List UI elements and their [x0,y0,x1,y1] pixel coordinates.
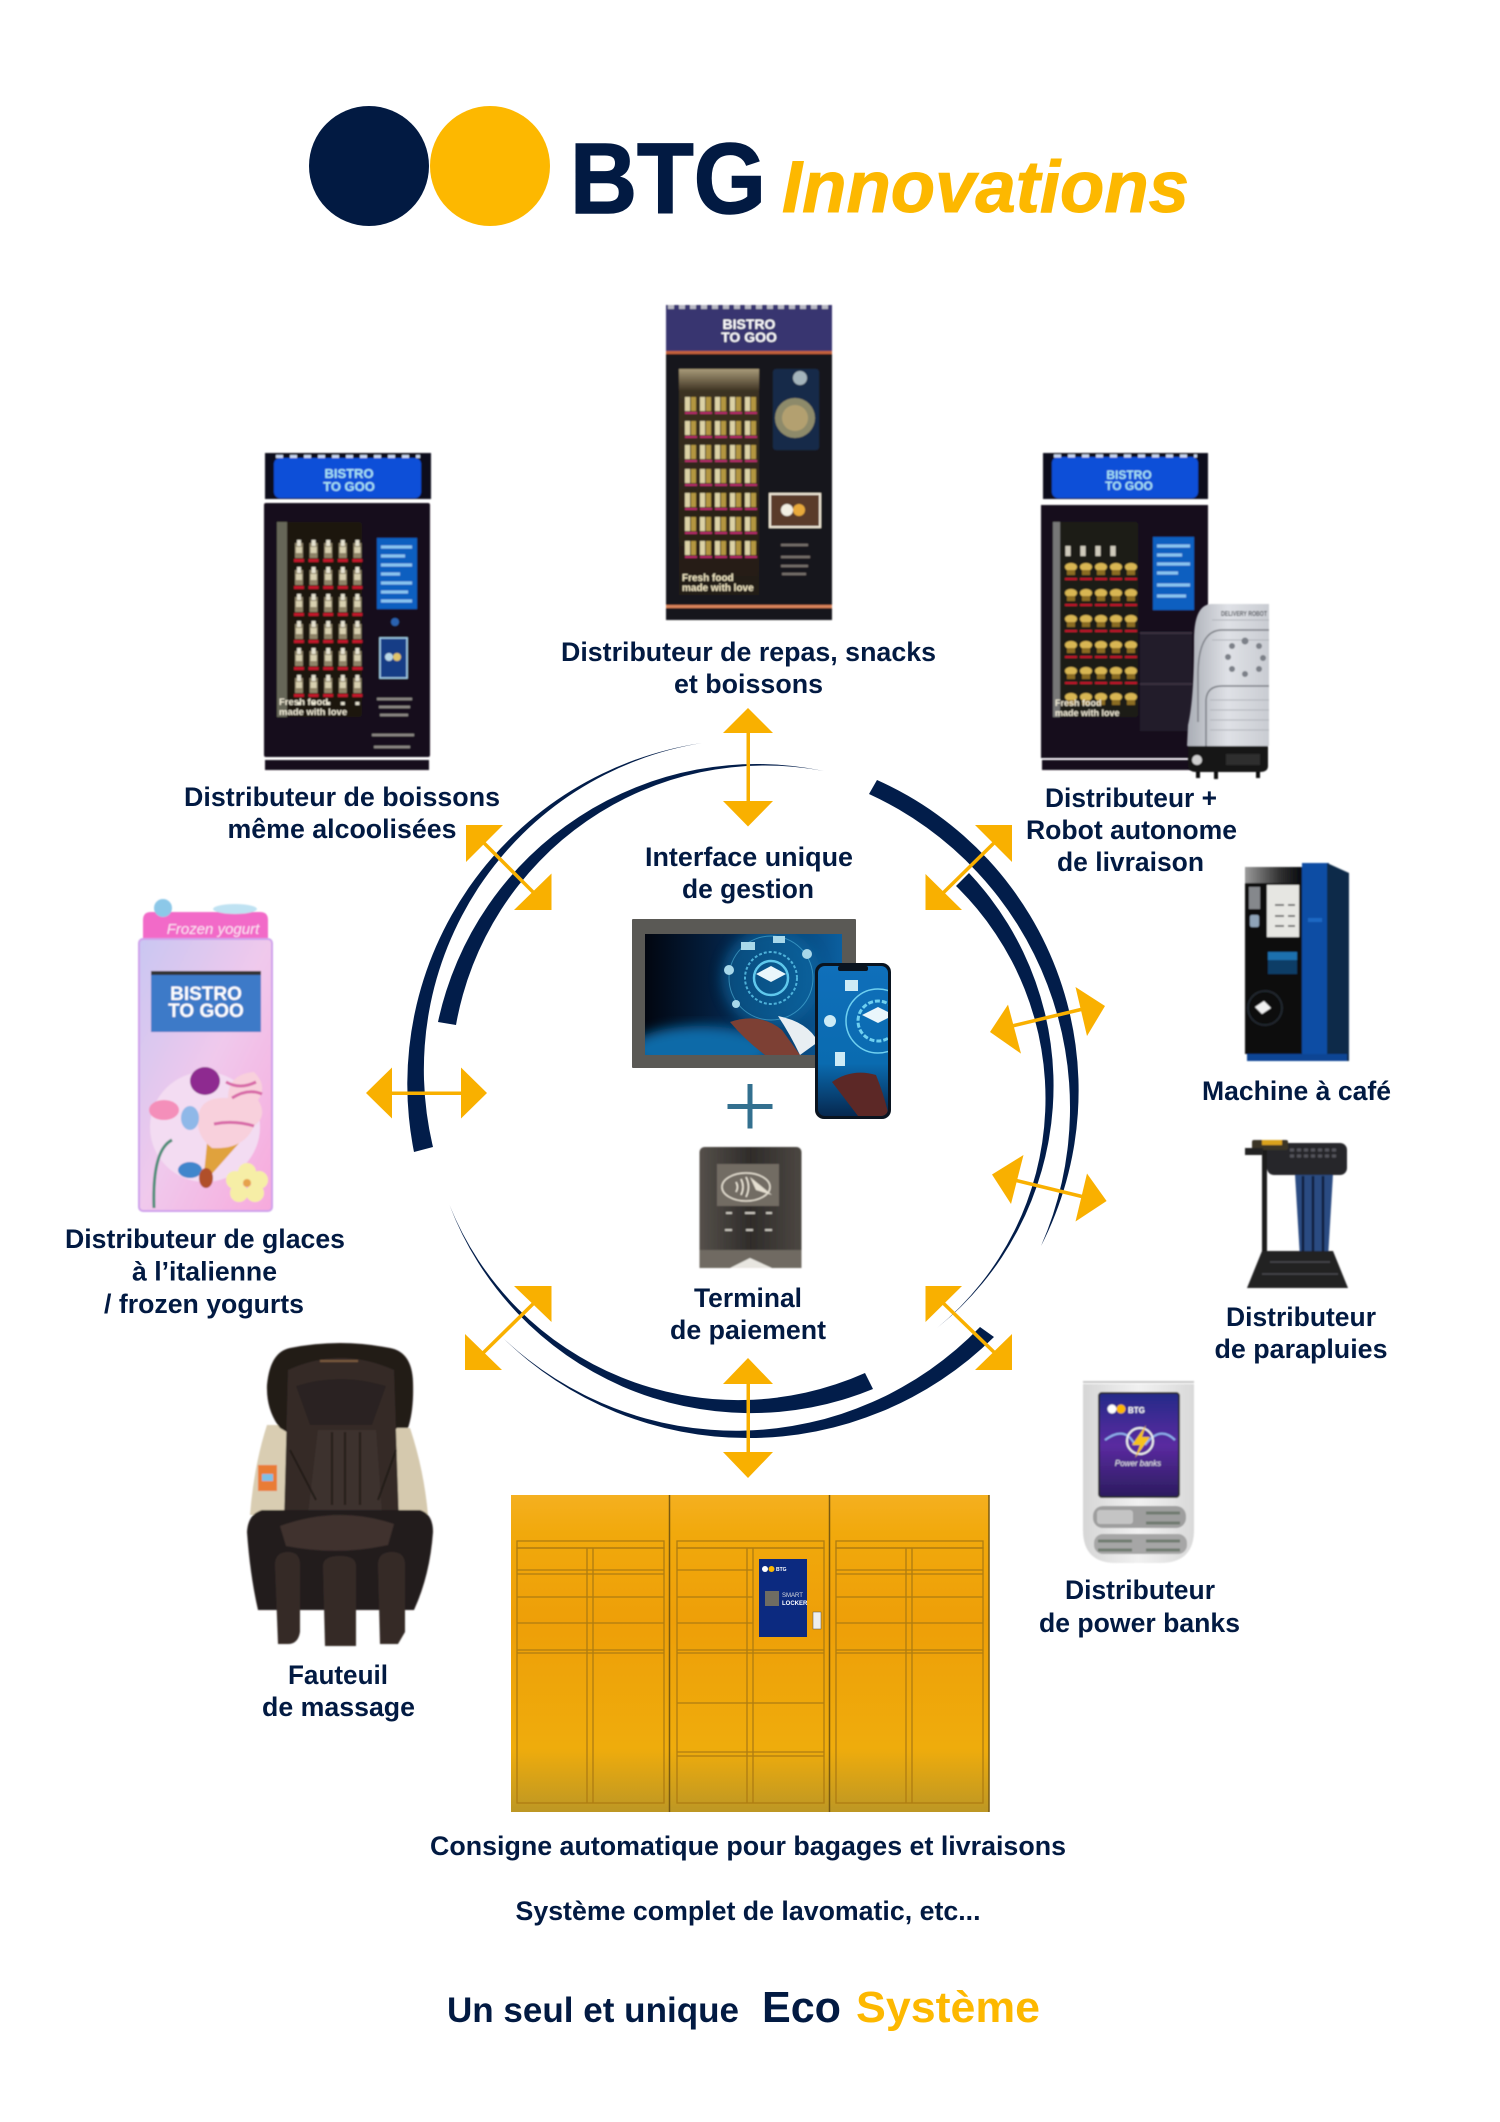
flower [226,1163,268,1202]
umbrellas [1295,1174,1333,1258]
label: power banks: Distributeur [1065,1575,1215,1605]
panel: drinks machine [264,453,431,770]
label: coffee machine: Machine à café [1202,1076,1391,1106]
header brand: BISTRO [723,316,776,332]
control panel [258,1465,277,1491]
locker screen [759,1559,808,1637]
label: massage chair: de massage [262,1692,415,1722]
monitor [632,919,856,1068]
panel: smart lockers [511,1495,989,1812]
base [247,1510,433,1610]
side text [372,699,414,747]
label: drinks machine: Distributeur de boissons [184,782,500,812]
logo [309,106,1189,235]
label: robot machine: Distributeur + [1045,783,1217,813]
header brand: BISTRO [1106,468,1152,482]
dispense hole [190,1067,220,1095]
touch screen [151,971,261,1032]
panel: frozen yogurt machine: TO GOO [168,1001,244,1022]
top unit [1267,1143,1347,1175]
seat [280,1515,394,1551]
cabinet side [1327,863,1349,1061]
machine cabinet [666,354,832,620]
label: payment terminal: de paiement [670,1315,826,1345]
label: drinks machine [184,782,500,844]
window slogan: Fresh food [1055,698,1102,708]
cabinet blue door [1302,863,1329,1055]
header brand: BISTRO [324,466,374,481]
label: frozen yogurt machine [65,1224,345,1319]
touch screen [773,369,819,450]
label: meals machine: Distributeur de repas, snacks [561,637,936,667]
label: massage chair [262,1660,415,1722]
arrow: top right [926,825,1012,910]
touch screen [1153,537,1194,610]
display window [679,369,759,595]
panel: meals machine: made with love [682,583,754,594]
panel: drinks machine: TO GOO [323,479,375,494]
panel: meals machine [666,305,832,620]
label: frozen yogurt machine: Distributeur de glaces [65,1224,345,1254]
logo: BTG wordmark: BTG [570,123,766,235]
pale disc [150,1072,260,1182]
beige side shells [250,1425,295,1515]
icon: delivery robot [1187,604,1269,779]
panel: umbrella stand [1245,1140,1348,1288]
label: robot machine: de livraison [1057,847,1204,877]
arrow: top [723,708,773,826]
panel: power bank station: BTG [1128,1406,1145,1415]
footer tagline: Eco [762,1983,841,2032]
label: frozen yogurt machine: / frozen yogurts [104,1289,304,1319]
panel: machine with delivery robot [1041,453,1208,770]
window slogan: Fresh food [279,697,328,708]
locker screen: SMART [782,1593,803,1599]
label: laundry system: Système complet de lavomatic, etc... [516,1896,980,1926]
label: power banks [1039,1575,1240,1638]
label: frozen yogurt machine: à l’italienne [132,1256,277,1286]
label: massage chair: Fauteuil [288,1660,388,1690]
decorative swirl [154,1140,172,1208]
label: umbrella stand [1214,1302,1388,1364]
arrow: left [366,1068,487,1118]
panel: meals machine: TO GOO [721,329,777,345]
touch screen [1267,885,1299,937]
base [1247,1251,1348,1288]
label: robot machine [1026,783,1237,877]
machine header [1043,453,1208,499]
arrow: bottom [723,1358,773,1478]
panel: coffee machine [1245,863,1349,1061]
label: payment terminal [670,1283,826,1345]
label: management interface [645,842,853,904]
touch screen [377,538,417,609]
arrow: umbrella stand [992,1155,1107,1222]
locker screen: BTG [776,1567,787,1573]
screen [1099,1393,1179,1497]
locker screen: LOCKER [782,1601,808,1607]
panel: machine with delivery robot: TO GOO [1105,479,1153,493]
logo: navy circle [309,106,429,226]
footer tagline: Système [856,1983,1040,2032]
cabinet [139,939,272,1211]
panel: management screen [630,919,856,1074]
ice cream cone [203,1133,248,1184]
machine header [265,453,431,499]
label: payment terminal: Terminal [694,1283,802,1313]
ecosystem ring arcs [407,743,1079,1438]
arrow: top left [466,825,552,910]
arrow: coffee machine [990,987,1105,1054]
tablet [380,638,407,678]
machine cabinet [264,503,430,757]
connection arrows [366,708,1107,1478]
footrests [275,1552,300,1644]
panel: machine with delivery robot: made with love [1055,708,1120,718]
floating icons [724,936,812,1008]
handset [1252,1140,1288,1150]
backrest [284,1358,399,1520]
flavour name: Frozen yogurt [167,921,260,938]
machine header [666,305,832,351]
pole [1262,1148,1267,1253]
icon: payment terminal [700,1147,802,1268]
label: management interface: de gestion [682,874,814,904]
locker body [511,1495,989,1812]
footer tagline: Un seul et unique [447,1991,739,2030]
power bank slots [1093,1506,1186,1528]
panel: drinks machine: made with love [279,707,347,718]
arrow: bottom left [465,1286,552,1370]
panel: frozen yogurt machine [139,899,272,1211]
holographic rings [729,936,813,1020]
label: lockers: Consigne automatique pour bagages et livraisons [430,1831,1066,1861]
label: meals machine [561,637,936,699]
head hood [267,1343,413,1440]
cabinet front [1245,867,1302,1054]
locker lines [517,1495,989,1812]
hand [730,1018,800,1055]
panel: power bank station [1083,1382,1194,1563]
screen brand: BISTRO [170,984,242,1005]
window slogan: Fresh food [682,573,734,584]
contactless logo [1248,991,1282,1025]
label: drinks machine: même alcoolisées [228,814,456,844]
arrow: bottom right [926,1286,1012,1370]
icon: delivery robot: DELIVERY ROBOT [1221,611,1268,618]
side text [781,545,810,574]
logo: Innovations wordmark: Innovations [782,147,1189,228]
machine cabinet [1041,505,1208,758]
panel: power bank station: Power banks [1115,1459,1161,1468]
label: umbrella stand: Distributeur [1226,1302,1376,1332]
graduation cap [756,966,786,982]
icon: smartphone [815,963,891,1119]
icon: plus [728,1084,772,1128]
label: umbrella stand: de parapluies [1214,1334,1388,1364]
label: robot machine: Robot autonome [1026,815,1237,845]
screen glow [645,1018,765,1055]
header lights [668,305,830,309]
display window [277,522,362,717]
logo card [770,494,820,527]
robot dock [1140,633,1192,731]
label: meals machine: et boissons [674,669,823,699]
machine header [143,912,268,939]
label: management interface: Interface unique [645,842,853,872]
label: power banks: de power banks [1039,1608,1240,1638]
dispenser window [1268,952,1297,974]
panel: massage chair [247,1343,433,1646]
scanner [813,1612,821,1629]
logo: yellow circle [430,106,550,226]
display window [1053,522,1138,717]
footer tagline [447,1983,1040,2032]
